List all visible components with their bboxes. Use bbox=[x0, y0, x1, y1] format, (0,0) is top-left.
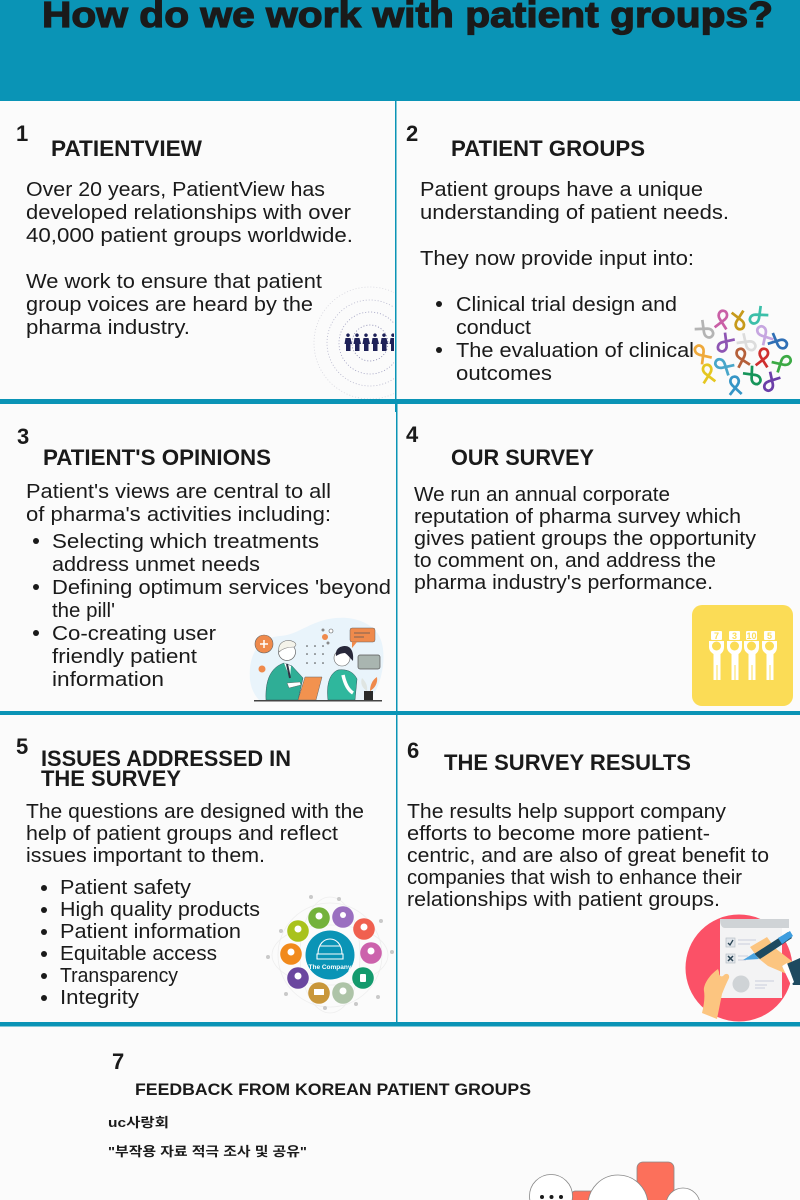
heading: Issues addressed in the survey bbox=[41, 746, 291, 791]
body text: PatientView: group voices are heard by the bbox=[26, 294, 313, 316]
body text: Our survey: to comment on, and address the bbox=[414, 550, 716, 572]
panel 7: Feedback from Korean patient groups bbox=[108, 1049, 700, 1200]
body text: Survey results: centric, and are also of great benefit to bbox=[407, 845, 769, 867]
number 2: 2 bbox=[406, 121, 418, 146]
body text: Patient groups bbox=[420, 179, 729, 385]
body text: Patient groups: understanding of patient needs. bbox=[420, 202, 729, 224]
body text: Our survey: pharma industry's performance. bbox=[414, 572, 713, 594]
body text: Patient's opinions bbox=[26, 481, 391, 691]
body text: Issues addressed: help of patient groups and reflect bbox=[26, 823, 338, 845]
bullet list: survey issues bbox=[41, 877, 260, 1009]
body text: Our survey: gives patient groups the opportunity bbox=[414, 528, 756, 550]
body text: Issues addressed bbox=[26, 801, 364, 867]
body text: Patient groups: They now provide input into: bbox=[420, 248, 694, 270]
panel 1: PatientView bbox=[16, 121, 426, 399]
body text: Patient groups: outcomes bbox=[456, 363, 552, 385]
bullet list: survey issues: High quality products bbox=[60, 899, 260, 921]
icon: people holding score cards: 3 bbox=[732, 631, 737, 641]
number 7: 7 bbox=[112, 1049, 124, 1074]
heading: PatientView: PATIENTVIEW bbox=[51, 136, 202, 161]
heading: Issues addressed in the survey: THE SURVEY bbox=[41, 766, 181, 791]
heading: Feedback from Korean patient groups: FEEDBACK FROM KOREAN PATIENT GROUPS bbox=[135, 1080, 531, 1099]
body text: Survey results: relationships with patient groups. bbox=[407, 889, 720, 911]
panel 4: Our survey bbox=[406, 422, 793, 706]
title banner bbox=[0, 0, 800, 101]
body text: PatientView: 40,000 patient groups worldwide. bbox=[26, 225, 353, 247]
bullet list: survey issues: Equitable access bbox=[60, 943, 217, 965]
number 5: 5 bbox=[16, 734, 28, 759]
heading: Issues addressed in the survey: ISSUES ADDRESSED IN bbox=[41, 746, 291, 771]
body text: Patient groups: Clinical trial design and bbox=[456, 294, 677, 316]
body text: Issues addressed: issues important to them. bbox=[26, 845, 265, 867]
body text: PatientView bbox=[26, 179, 353, 339]
bullet list: survey issues: Integrity bbox=[60, 987, 139, 1009]
illustration: doctor and patient bbox=[250, 618, 384, 702]
bullet list: survey issues: Patient information bbox=[60, 921, 241, 943]
heading: Patient's opinions: PATIENT'S OPINIONS bbox=[43, 445, 271, 470]
panel 3: Patient's opinions bbox=[17, 424, 391, 702]
icon: people holding score cards: 10 bbox=[746, 631, 757, 641]
heading: The survey results: THE SURVEY RESULTS bbox=[444, 750, 691, 775]
body text: Patient's opinions: address unmet needs bbox=[52, 554, 260, 576]
illustration: hand filling a checklist bbox=[686, 914, 800, 1022]
body text: Patient's opinions: the pill' bbox=[52, 600, 115, 622]
diagram: the company wheel: The Company bbox=[309, 964, 352, 971]
heading: Our survey: OUR SURVEY bbox=[451, 445, 594, 470]
body text: PatientView: developed relationships with over bbox=[26, 202, 351, 224]
body text: PatientView: Over 20 years, PatientView has bbox=[26, 179, 325, 201]
body text: PatientView: We work to ensure that patient bbox=[26, 271, 322, 293]
body text: Patient groups: Patient groups have a unique bbox=[420, 179, 703, 201]
body text: Our survey: We run an annual corporate bbox=[414, 484, 670, 506]
number 3: 3 bbox=[17, 424, 29, 449]
bullet list: survey issues: Transparency bbox=[60, 965, 178, 987]
icon: people holding score cards: 7 bbox=[714, 631, 719, 641]
heading: Patient groups: PATIENT GROUPS bbox=[451, 136, 645, 161]
panel 5: Issues addressed bbox=[16, 734, 394, 1013]
body text: Patient's opinions: Defining optimum services 'beyond bbox=[52, 577, 391, 599]
body text: Issues addressed: The questions are designed with the bbox=[26, 801, 364, 823]
panel 2: Patient groups bbox=[406, 121, 793, 395]
body text: Patient's opinions: Patient's views are central to all bbox=[26, 481, 331, 503]
body text: Survey results: The results help support company bbox=[407, 801, 726, 823]
body text: Patient's opinions: Selecting which treatments bbox=[52, 531, 319, 553]
patient group quote: "부작용 자료 적극 조사 및 공유" bbox=[108, 1144, 307, 1159]
body text: Survey results: companies that wish to enhance their bbox=[407, 867, 742, 889]
icon: people with radiating circles bbox=[314, 286, 394, 399]
panel 6: Survey results bbox=[407, 738, 800, 1022]
body text: Survey results: efforts to become more patient- bbox=[407, 823, 710, 845]
body text: Survey results bbox=[407, 801, 769, 911]
bullet list: survey issues: Patient safety bbox=[60, 877, 191, 899]
body text: Patient's opinions: Co-creating user bbox=[52, 623, 216, 645]
icon: people holding score cards: 5 bbox=[767, 631, 772, 641]
organisation name: uc사랑회 bbox=[108, 1115, 169, 1130]
number 1: 1 bbox=[16, 121, 28, 146]
diagram: the company wheel bbox=[266, 895, 394, 1013]
number 6: 6 bbox=[407, 738, 419, 763]
body text: Our survey bbox=[414, 484, 756, 594]
body text: Patient's opinions: information bbox=[52, 669, 164, 691]
body text: Patient groups: conduct bbox=[456, 317, 531, 339]
body text: Patient's opinions: of pharma's activities including: bbox=[26, 504, 331, 526]
number 4: 4 bbox=[406, 422, 419, 447]
icon: awareness ribbons bbox=[692, 306, 793, 395]
icon: people holding score cards bbox=[692, 605, 793, 706]
icon: speech bubbles bbox=[530, 1162, 700, 1200]
body text: Patient's opinions: friendly patient bbox=[52, 646, 197, 668]
body text: PatientView: pharma industry. bbox=[26, 317, 190, 339]
body text: Our survey: reputation of pharma survey which bbox=[414, 506, 741, 528]
body text: Patient groups: The evaluation of clinical bbox=[456, 340, 694, 362]
